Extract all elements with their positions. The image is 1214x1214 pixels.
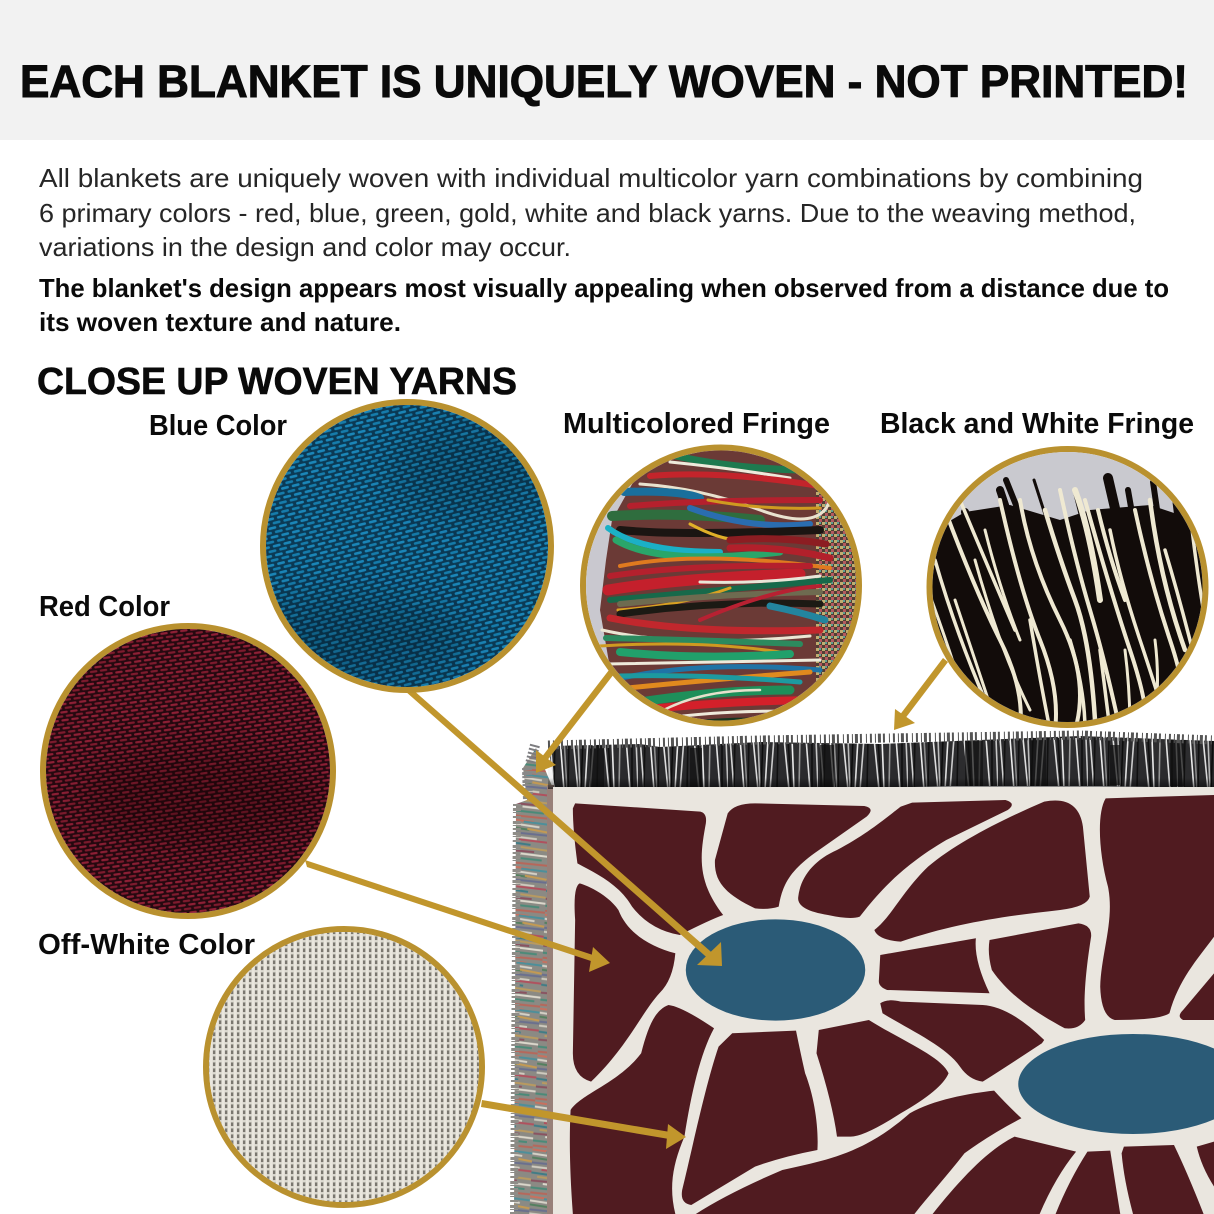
title banner <box>0 0 1214 140</box>
arrow: black and white swatch to top fringe <box>894 658 948 730</box>
blue oval right <box>1018 1034 1214 1134</box>
section heading: CLOSE UP WOVEN YARNS <box>37 361 517 403</box>
flower artwork <box>570 795 1214 1214</box>
intro bold line 1: The blanket's design appears most visually appealing when observed from a distance due to <box>39 273 1169 303</box>
swatch: blue weave <box>230 399 554 693</box>
swatch: red weave <box>40 624 336 920</box>
arrow: red swatch to maroon <box>305 860 610 972</box>
intro bold line 2: its woven texture and nature. <box>39 307 401 337</box>
left multicolor fringe <box>514 745 554 1214</box>
blue oval left <box>686 919 865 1021</box>
label: multicolored fringe: Multicolored Fringe <box>563 408 830 440</box>
intro regular line 2: 6 primary colors - red, blue, green, gold, white and black yarns. Due to the weaving method, <box>39 198 1136 228</box>
swatch: multicolored fringe <box>578 442 864 730</box>
intro text block <box>39 163 1169 337</box>
label: red color: Red Color <box>39 591 170 623</box>
intro regular line 3: variations in the design and color may occur. <box>39 232 571 262</box>
swatch: off-white weave <box>203 925 485 1209</box>
arrow: multicolor swatch to left fringe <box>536 670 614 773</box>
blanket cloth <box>553 787 1214 1214</box>
label: blue color: Blue Color <box>149 410 287 442</box>
maroon petals <box>570 795 1214 1214</box>
intro regular line 1: All blankets are uniquely woven with individual multicolor yarn combinations by combining <box>39 163 1143 193</box>
arrow: blue swatch to blue oval <box>405 689 722 966</box>
label: black and white fringe: Black and White Fringe <box>880 408 1194 440</box>
label: off-white color: Off-White Color <box>38 929 255 961</box>
blanket photo <box>514 735 1214 1214</box>
swatch: black and white fringe <box>924 444 1210 730</box>
arrow: off-white swatch to cloth <box>481 1100 686 1149</box>
connector arrows <box>305 658 948 1149</box>
top black and white fringe <box>548 735 1214 789</box>
title: EACH BLANKET IS UNIQUELY WOVEN - NOT PRINTED! <box>20 56 1188 107</box>
